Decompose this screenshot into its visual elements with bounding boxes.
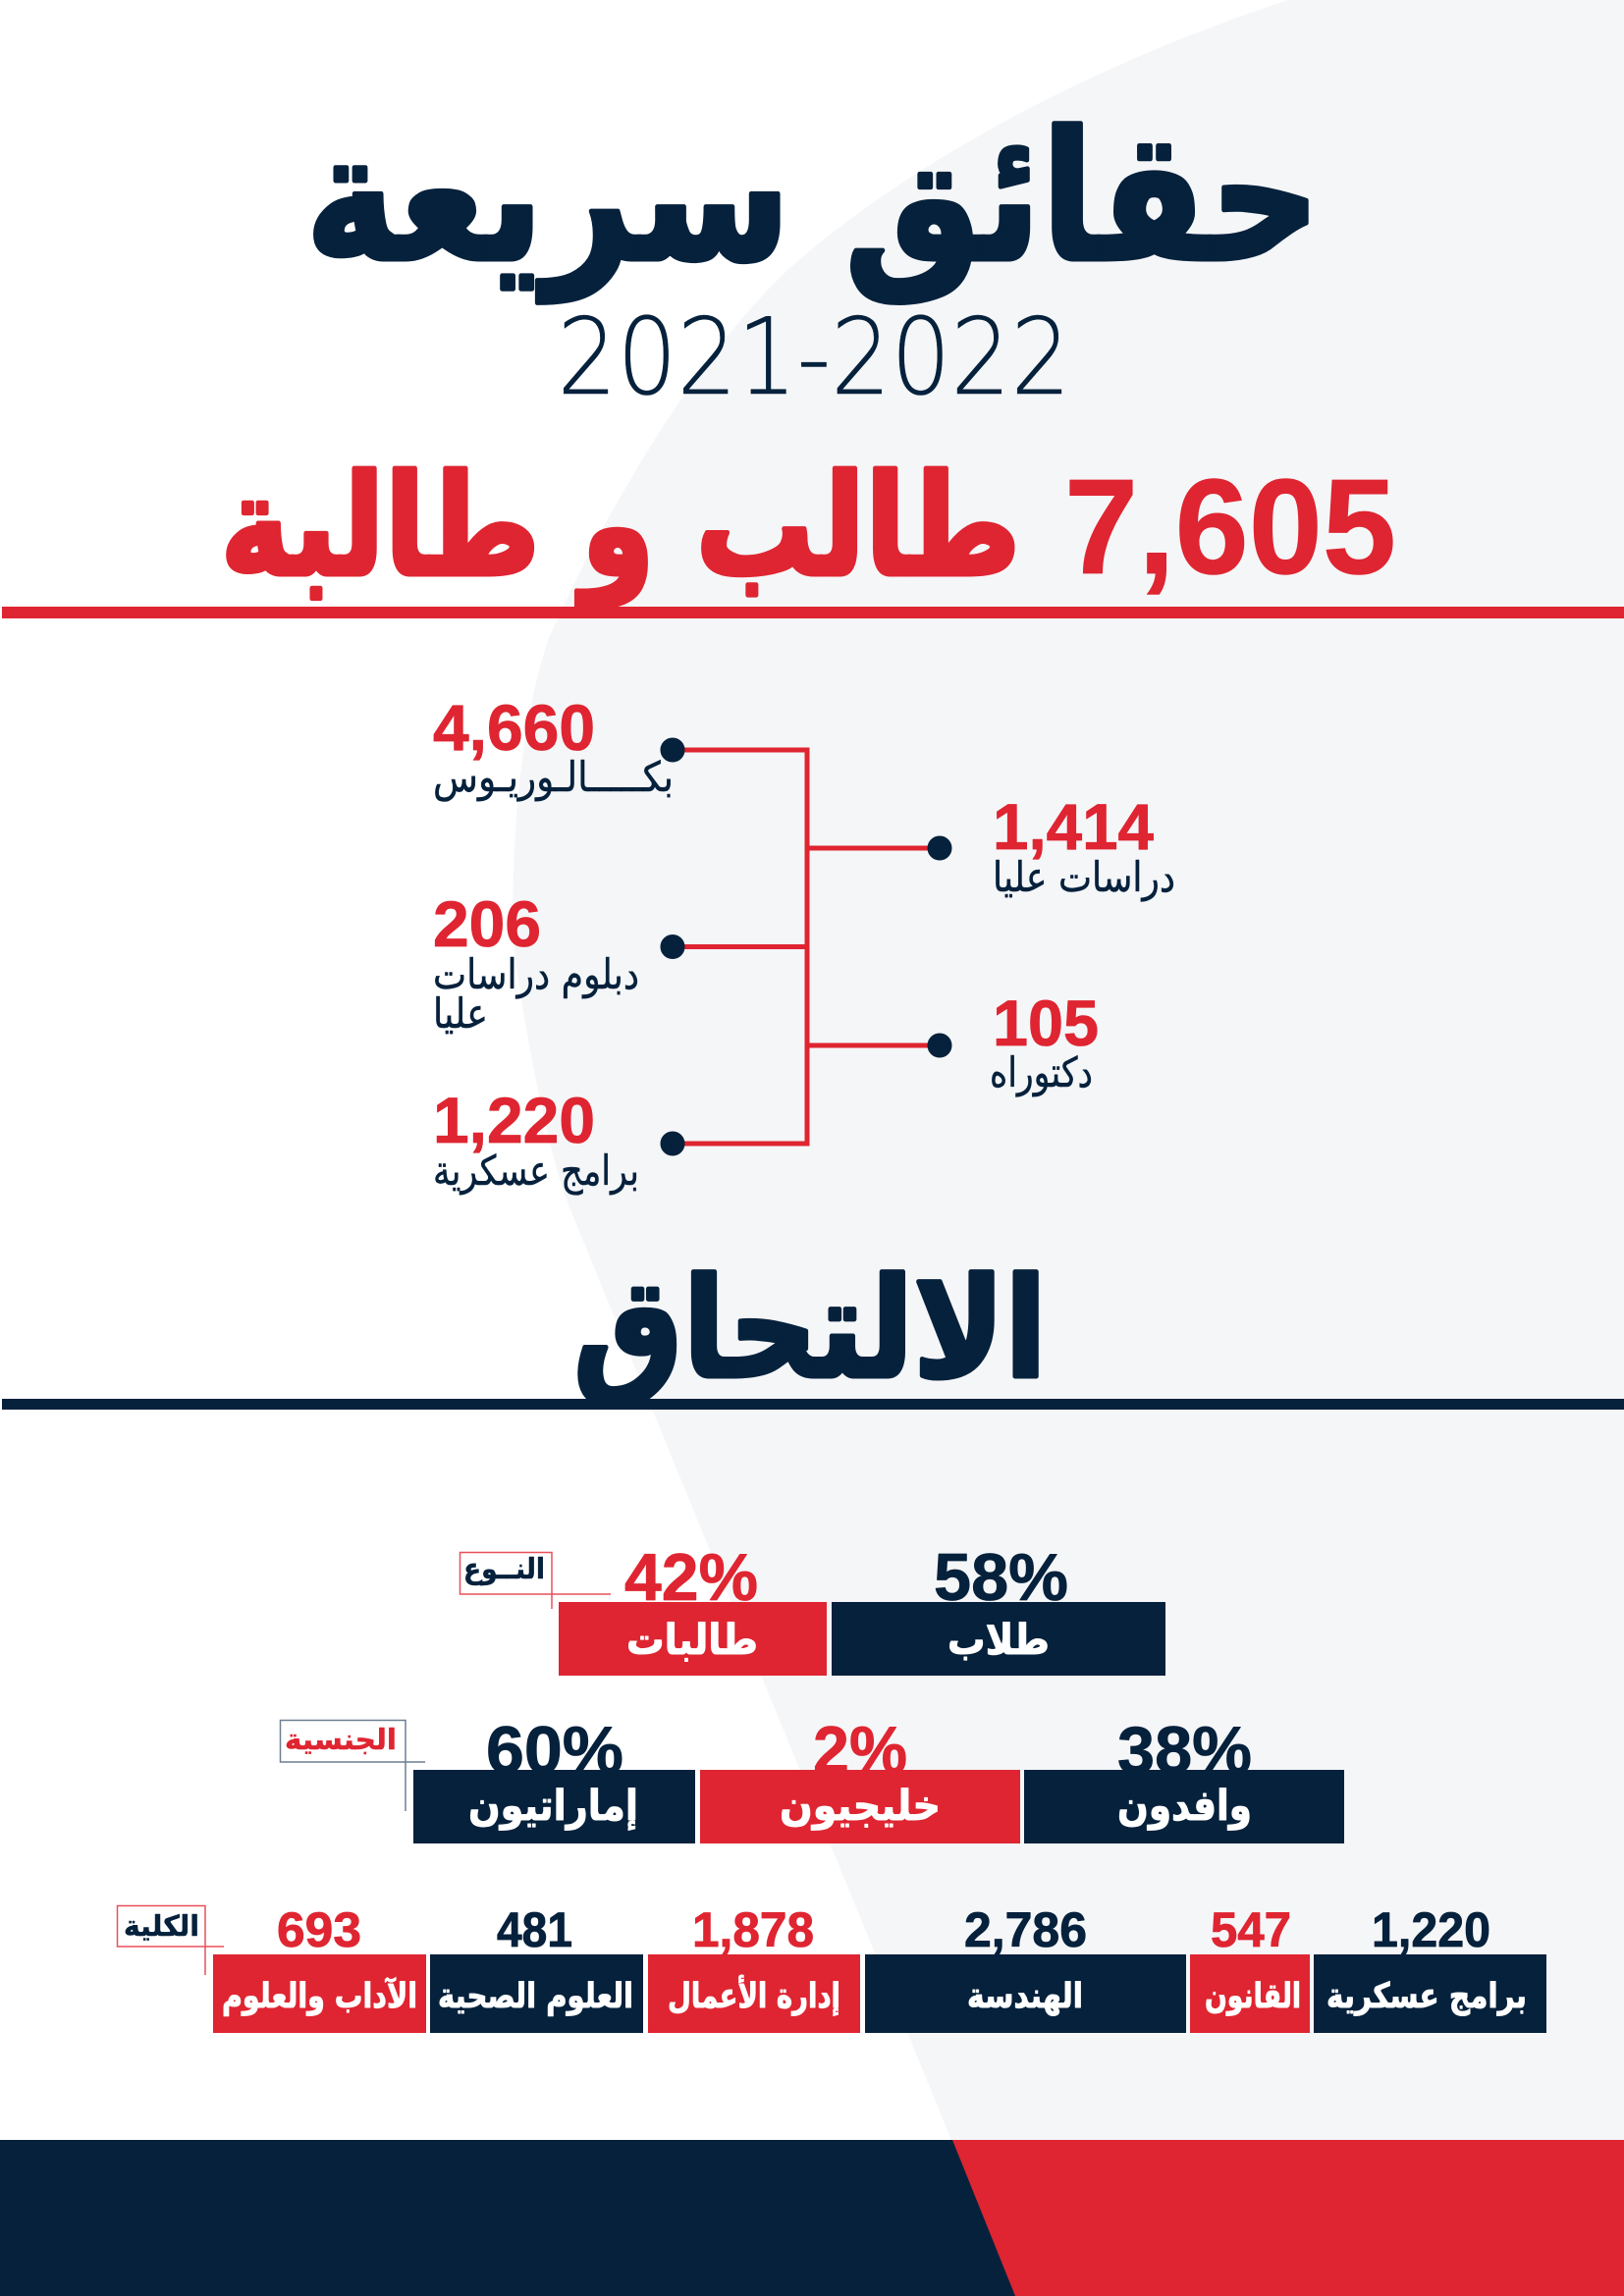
percent: emirati: 60% — [486, 1713, 623, 1788]
stat: postgraduate diploma: عليا — [433, 989, 488, 1038]
stat: military programmes: برامج عسكرية — [433, 1147, 639, 1196]
college: business administration — [648, 1902, 860, 2033]
bar: female — [559, 1602, 827, 1676]
college: health sciences: 481 — [497, 1902, 572, 1957]
background shape: curved grey area — [513, 0, 1624, 2296]
college: health sciences — [430, 1902, 643, 2033]
red divider — [2, 607, 1624, 618]
connector lines — [673, 750, 940, 1144]
row: gender — [460, 1540, 1165, 1676]
college: military programmes: برامج عسكرية — [1326, 1977, 1527, 2016]
percent: female: 42% — [624, 1540, 758, 1615]
stat: military programmes: 1,220 — [433, 1084, 595, 1156]
bar: male — [832, 1602, 1165, 1676]
title: حقائق سريعة — [305, 93, 1321, 303]
college: engineering: 2,786 — [964, 1902, 1087, 1957]
callout: nationality — [281, 1720, 425, 1811]
stat: postgraduate diploma: دبلوم دراسات — [433, 950, 639, 998]
college: engineering: الهندسة — [967, 1977, 1083, 2016]
stat: doctorate: دكتوراه — [990, 1048, 1093, 1096]
stat: postgraduate diploma — [433, 887, 639, 1038]
college: arts and sciences — [213, 1902, 426, 2033]
college: law: 547 — [1211, 1902, 1291, 1957]
college: military programmes — [1314, 1902, 1546, 2033]
bar: female: طالبات — [626, 1616, 758, 1665]
college: business administration: إدارة الأعمال — [668, 1974, 840, 2016]
bar: male: طلاب — [947, 1616, 1050, 1665]
college: health sciences: العلوم الصحية — [438, 1977, 633, 2016]
row: nationality — [281, 1713, 1344, 1843]
stat: bachelor: 4,660 — [433, 691, 595, 764]
college: arts and sciences: الآداب والعلوم — [222, 1976, 417, 2016]
navy divider — [2, 1399, 1624, 1410]
percent: male: 58% — [934, 1540, 1068, 1615]
college: engineering — [865, 1902, 1186, 2033]
percent: expatriates: 38% — [1117, 1713, 1252, 1788]
stat: bachelor: بكـــــالـوريـوس — [433, 753, 674, 801]
stat: postgraduate diploma: 206 — [433, 887, 541, 960]
callout: gender: النــوع — [463, 1552, 545, 1585]
college: arts and sciences: 693 — [277, 1902, 361, 1957]
tree chart: student breakdown — [433, 691, 1175, 1196]
college: law — [1190, 1902, 1310, 2033]
bar: expatriates — [1024, 1770, 1344, 1843]
percent: gulf: 2% — [813, 1713, 907, 1788]
stat: graduate studies: 1,414 — [993, 790, 1154, 863]
bar: expatriates: وافدون — [1117, 1782, 1252, 1831]
bar: emirati — [413, 1770, 695, 1843]
stat: bachelor — [433, 691, 674, 801]
footer band — [0, 2140, 1624, 2296]
stat: doctorate — [990, 987, 1099, 1096]
bar: gulf: خليجيون — [780, 1782, 941, 1831]
total students headline: طالب و طالبة — [220, 446, 1021, 609]
callout: gender — [460, 1552, 611, 1609]
callout: nationality: الجنسية — [285, 1723, 397, 1756]
bar: emirati: إماراتيون — [468, 1782, 638, 1831]
total students headline: 7,605 — [1064, 452, 1396, 603]
stat: military programmes — [433, 1084, 639, 1196]
subtitle: years: 2021-2022 — [558, 296, 1070, 419]
callout: college — [118, 1906, 224, 1975]
college: military programmes: 1,220 — [1372, 1902, 1490, 1957]
bar: gulf — [700, 1770, 1020, 1843]
college: law: القانون — [1205, 1977, 1301, 2016]
row: colleges — [118, 1902, 1546, 2033]
college: business administration: 1,878 — [692, 1902, 814, 1957]
stat: graduate studies: دراسات عليا — [993, 853, 1175, 901]
stat: doctorate: 105 — [993, 987, 1099, 1059]
callout: college: الكلية — [124, 1909, 199, 1943]
dots — [661, 738, 951, 1155]
enrollment heading: الالتحاق — [573, 1250, 1047, 1410]
stat: graduate studies — [993, 790, 1175, 901]
